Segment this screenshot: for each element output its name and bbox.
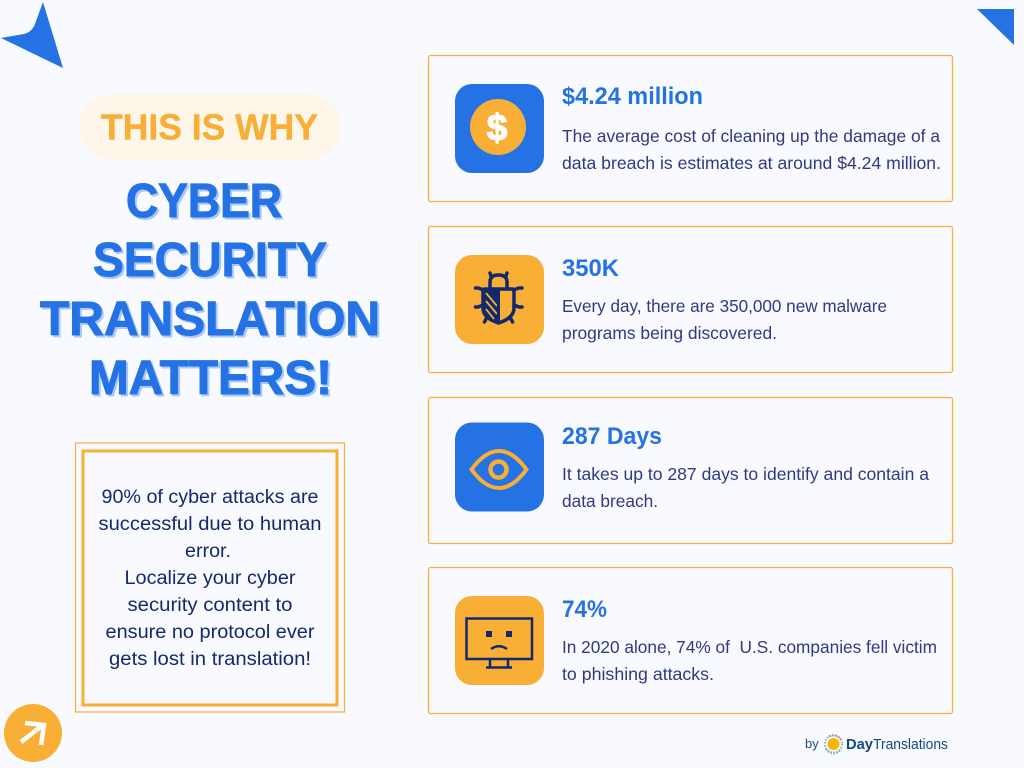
icon: bug (455, 255, 544, 344)
callout text: ensure no protocol ever (106, 622, 315, 643)
icon: blue triangle top right (977, 9, 1014, 45)
callout text: error. (185, 541, 231, 562)
heading pill: this is why: THIS IS WHY (101, 106, 318, 148)
logo: Day Translations: by (805, 736, 819, 751)
panel: human error callout (76, 443, 344, 712)
icon: sun (825, 735, 842, 754)
stat: 287 Days: 287 Days (562, 423, 662, 450)
description: In 2020 alone, 74% of U.S. companies fell victim (562, 637, 937, 657)
title: SECURITY (93, 234, 327, 287)
description (562, 637, 937, 684)
description: data breach. (562, 491, 658, 511)
panel: time to contain (428, 398, 952, 544)
icon: dollar coin (455, 84, 544, 173)
icon: eye (455, 422, 544, 512)
callout text: 90% of cyber attacks are (102, 487, 318, 508)
panel: cost of data breach (428, 56, 952, 202)
description: Every day, there are 350,000 new malware (562, 296, 887, 316)
stat: 74%: 74% (562, 596, 607, 623)
callout text: successful due to human (98, 514, 322, 535)
title: SECURITY (95, 236, 329, 289)
description: The average cost of cleaning up the damage of a (562, 126, 940, 146)
callout text (98, 487, 322, 670)
panel: phishing (428, 568, 952, 714)
callout text: gets lost in translation! (109, 649, 311, 670)
title: TRANSLATION (42, 295, 382, 348)
title: CYBER (126, 175, 282, 228)
description: to phishing attacks. (562, 664, 714, 684)
title (40, 175, 382, 407)
callout text: security content to (128, 595, 292, 616)
description: data breach is estimates at around $4.24 million. (562, 153, 941, 173)
description (562, 126, 941, 173)
icon: sad monitor (455, 596, 544, 685)
callout text: Localize your cyber (124, 568, 296, 589)
icon: blue arrowhead top left (1, 2, 63, 68)
icon: dollar coin: $ (487, 107, 508, 148)
title: CYBER (128, 177, 284, 230)
stat: 350K: 350K (562, 255, 620, 282)
title: MATTERS! (91, 354, 334, 407)
description (562, 296, 887, 343)
stat: $4.24 million: $4.24 million (562, 83, 703, 110)
logo: Day Translations: Translations (873, 736, 948, 753)
description: It takes up to 287 days to identify and contain a (562, 464, 929, 484)
logo: Day Translations (805, 735, 948, 754)
title: MATTERS! (89, 352, 332, 405)
icon: arrow button (4, 704, 62, 762)
heading pill: this is why (79, 94, 341, 160)
panel: new malware (428, 226, 952, 372)
description: programs being discovered. (562, 323, 777, 343)
description (562, 464, 929, 511)
title: TRANSLATION (40, 293, 380, 346)
logo: Day Translations: Day (846, 736, 874, 753)
